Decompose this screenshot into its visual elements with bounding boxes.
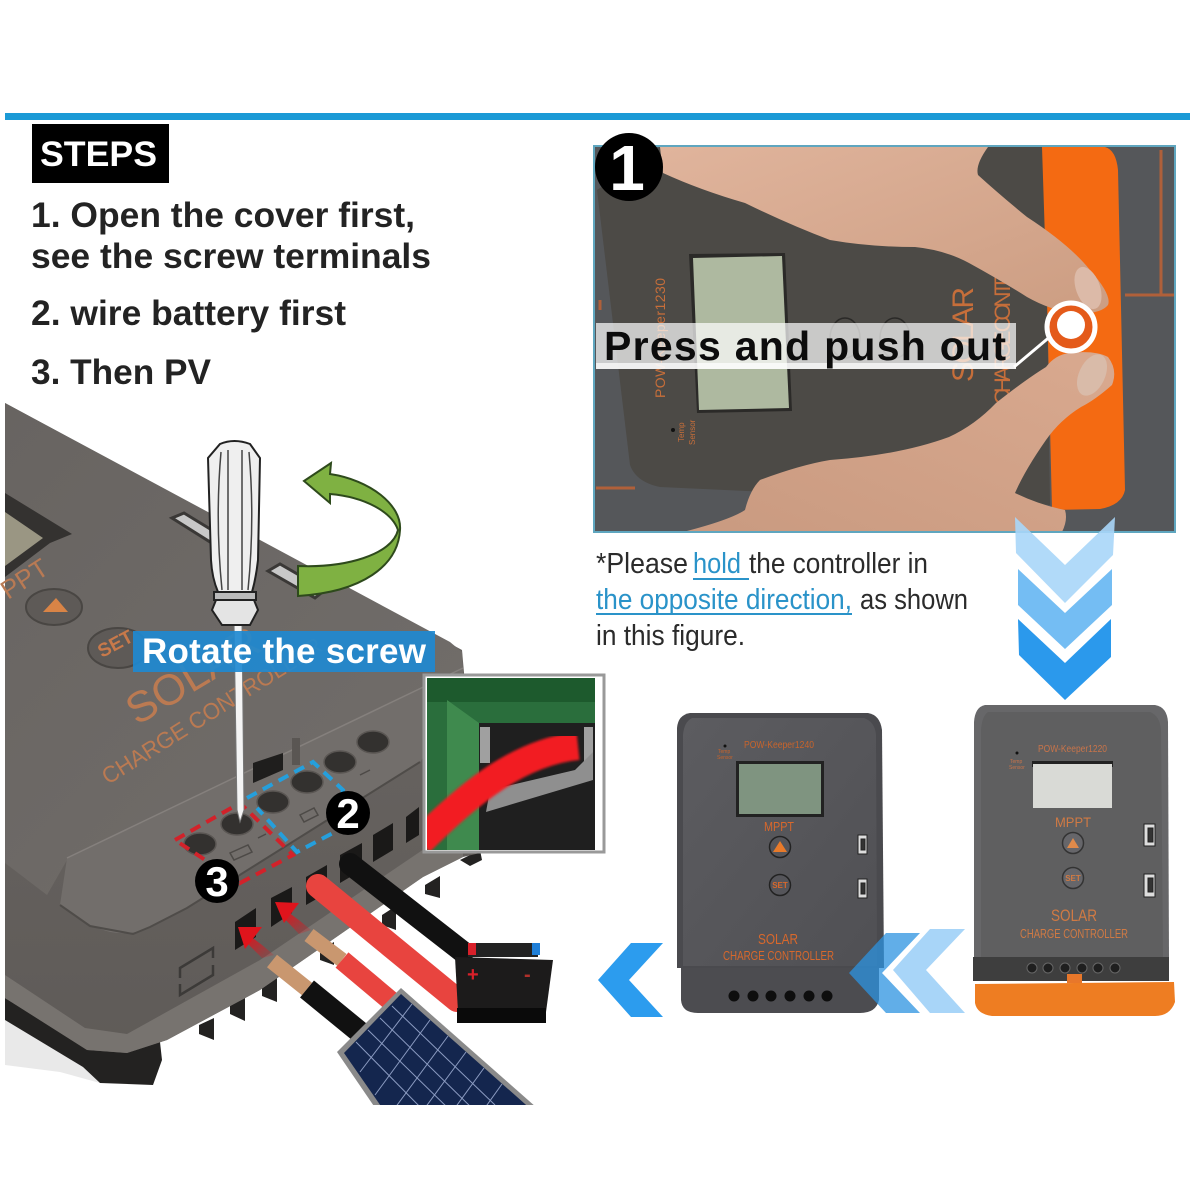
port openings	[235, 807, 419, 950]
terminal strip lip	[60, 668, 463, 933]
callout marker	[1014, 303, 1095, 367]
arrow button	[770, 836, 790, 858]
solar label in photo: SOLAR	[947, 287, 980, 382]
battery: -	[524, 964, 531, 986]
orange cover	[1042, 147, 1125, 510]
arrow: solid blue chevron left	[598, 943, 663, 1017]
green rotation arrow	[298, 463, 400, 596]
note text: the controller in	[749, 548, 928, 580]
panel: photo of removing the cover	[594, 132, 1175, 532]
temp sensor label: Temp	[1010, 759, 1022, 765]
temp sensor label: Temp	[677, 422, 686, 442]
note text: *Please	[596, 548, 688, 580]
steps list: see the screw terminals	[31, 237, 431, 276]
set button: SET	[94, 626, 137, 662]
controller with cover removed	[677, 713, 884, 1013]
terminal holes	[728, 990, 832, 1002]
press label band	[596, 323, 1016, 369]
upper hand	[660, 147, 1109, 313]
note text: the opposite direction,	[596, 584, 852, 616]
mat orange lines	[596, 150, 1175, 488]
controller feet and fins	[5, 850, 482, 1085]
set button	[88, 626, 148, 668]
charge controller label: CHARGE CONTROLLER	[723, 948, 834, 963]
screwdriver handle	[208, 441, 260, 625]
steps list	[31, 196, 431, 392]
cable: red battery wire	[318, 886, 457, 1000]
battery	[455, 943, 553, 1023]
panel: wiring illustration of the controller	[0, 403, 604, 1115]
step badge 1	[595, 132, 663, 204]
rotate the screw label: Rotate the screw	[142, 632, 427, 671]
mppt label: MPPT	[764, 819, 794, 834]
step badge 3	[195, 858, 239, 905]
solar label: SOLAR	[117, 617, 269, 735]
charge controller label: CHARGE CONTROLLER	[1020, 926, 1128, 941]
usb ports	[1144, 824, 1155, 897]
controller body in photo	[597, 147, 1050, 505]
lcd in photo	[689, 253, 792, 413]
charge controller label in photo: CHARGE CONTR	[990, 270, 1015, 405]
model label: POW-Keeper1220	[1038, 744, 1107, 755]
center tab	[253, 738, 300, 783]
set button: SET	[1065, 874, 1081, 883]
steps list: 2. wire battery first	[31, 294, 346, 333]
lcd	[1032, 761, 1113, 808]
charge controller label: CHARGE CONTROLLER	[97, 632, 327, 789]
arrow button	[1062, 832, 1084, 854]
set button: SET	[772, 881, 788, 890]
lcd	[736, 761, 824, 817]
temp sensor label	[671, 419, 697, 445]
step badge 1: 1	[609, 132, 645, 204]
cable: black pv wire	[272, 961, 362, 1034]
temp sensor label: Sensor	[1009, 765, 1025, 771]
set button	[1062, 868, 1084, 888]
controller top face	[5, 403, 463, 895]
cable: red pv wire	[309, 935, 392, 1002]
arrow: mid blue chevron left	[849, 933, 920, 1013]
inset: wire in terminal	[420, 675, 604, 852]
arrow: light blue chevron left	[893, 929, 965, 1013]
step badge 2	[326, 790, 370, 837]
cable: black battery wire	[350, 864, 463, 952]
steps heading	[32, 124, 169, 183]
controller with orange cover	[973, 705, 1175, 1016]
front lower bevel	[5, 840, 463, 1053]
steps heading: STEPS	[40, 135, 157, 174]
terminal holes	[184, 731, 389, 855]
solar panel	[337, 988, 534, 1105]
mppt label: MPPT	[1055, 814, 1091, 830]
steps list: 1. Open the cover first,	[31, 196, 415, 235]
top blue rule	[5, 113, 1190, 120]
temp sensor label: Temp	[718, 749, 730, 755]
lcd window	[5, 493, 72, 577]
screwdriver shaft	[234, 622, 244, 822]
red dashed box: pv terminals	[175, 803, 293, 883]
note text: hold	[693, 548, 741, 580]
usb slots	[172, 513, 325, 598]
note text: in this figure.	[596, 620, 745, 652]
temp sensor label	[717, 744, 733, 761]
arrow: blue chevrons down	[1015, 517, 1115, 700]
red insertion arrows	[238, 902, 311, 958]
note text	[596, 548, 968, 652]
orange cover	[975, 974, 1175, 1016]
set button	[770, 874, 790, 896]
controller body silhouette	[5, 403, 480, 1053]
model label: POW-Keeper1240	[744, 740, 814, 751]
note text: as shown	[860, 584, 968, 616]
mat background	[594, 146, 1175, 532]
lip top highlight	[67, 668, 463, 858]
lip shadow edge	[60, 762, 420, 934]
temp sensor label	[1009, 752, 1025, 771]
press and push out: Press and push out	[604, 323, 1006, 369]
temp sensor label: Sensor	[688, 419, 697, 445]
lower hand	[683, 350, 1114, 532]
terminal screws	[1027, 963, 1120, 973]
steps list: 3. Then PV	[31, 353, 212, 392]
photo buttons	[830, 318, 910, 358]
battery: +	[467, 964, 479, 986]
solar label: SOLAR	[1051, 906, 1097, 925]
blue dashed box: battery terminals	[247, 762, 343, 852]
embossed rectangle	[180, 948, 213, 995]
solar label: SOLAR	[758, 931, 798, 948]
usb ports	[858, 835, 867, 898]
terminal symbols	[230, 770, 370, 860]
photo device labels: POW-Keeper1230	[652, 278, 668, 398]
step badge 3: 3	[205, 858, 229, 905]
floor shadow	[5, 1020, 100, 1083]
temp sensor label: Sensor	[717, 755, 733, 761]
step badge 2: 2	[336, 790, 360, 837]
photo border	[594, 146, 1175, 532]
arrow button	[26, 589, 82, 625]
